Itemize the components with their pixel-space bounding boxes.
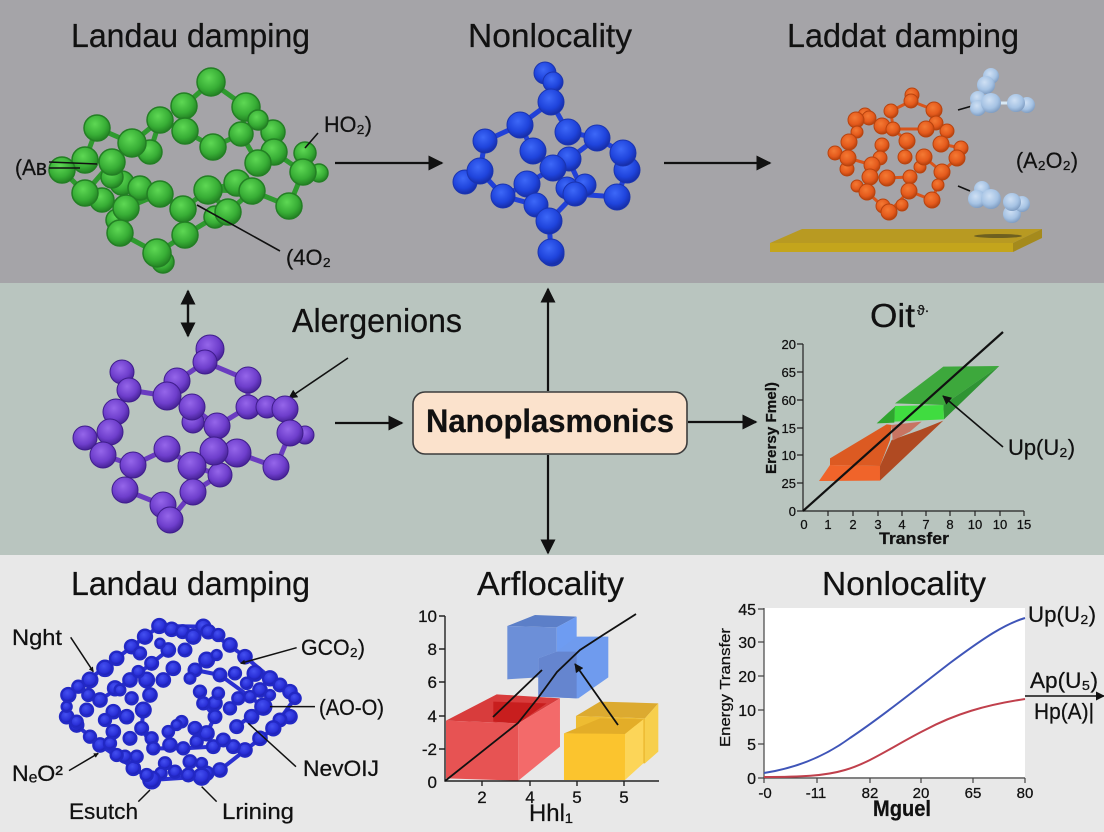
y tick labels: 10	[738, 703, 756, 720]
plot area	[764, 608, 1025, 777]
red block	[446, 694, 560, 781]
x tick labels: -11	[806, 785, 826, 802]
heading: Oit: Oit	[870, 297, 915, 334]
blue molecule	[453, 62, 640, 266]
y tick labels: 20	[782, 337, 796, 352]
x tick labels: 10	[993, 517, 1007, 532]
axes	[439, 616, 659, 786]
title: Nonlocality: Nonlocality	[468, 17, 632, 54]
y tick labels: 0	[789, 504, 796, 519]
label: Lrining: Lrining	[222, 799, 294, 824]
label: NeO2: NₑO²	[12, 761, 63, 786]
label: Esutch: Esutch	[69, 799, 138, 824]
x tick labels: 1	[824, 517, 832, 532]
purple molecule	[73, 335, 314, 533]
label: (4O2: (4O₂	[286, 245, 331, 270]
label: Nght: Nght	[12, 625, 62, 650]
y axis title: Erersy Fmel)	[763, 382, 780, 474]
y tick labels: 65	[782, 365, 796, 380]
light blue cluster lower	[958, 181, 1030, 223]
blue curve	[764, 618, 1025, 773]
y tick labels	[782, 337, 796, 519]
short line	[493, 670, 542, 717]
x tick labels: 2	[477, 788, 487, 807]
arrow: box to chart	[688, 421, 756, 423]
blue blocks	[507, 615, 608, 698]
label: AO-O: (AO-O)	[319, 695, 384, 720]
arrow	[1025, 695, 1104, 697]
x tick labels	[758, 785, 1033, 802]
yellow blocks	[564, 702, 658, 780]
y tick labels: 20	[738, 669, 756, 686]
chart: energy transfer	[763, 332, 1075, 548]
title: Nonlocality: Nonlocality	[822, 565, 986, 602]
panel: top band	[0, 0, 1104, 283]
x tick labels: 80	[1017, 785, 1033, 802]
callout arrow	[943, 396, 1003, 447]
leader lines: green molecule	[49, 133, 318, 251]
x axis title: Hhl₁	[529, 800, 573, 827]
arrow: purple to center box	[335, 422, 402, 424]
x tick labels: 65	[965, 785, 981, 802]
x tick labels: 4	[525, 788, 535, 807]
label: GCO2: GCO₂)	[301, 635, 365, 660]
label: Ag: (Aв	[15, 155, 47, 180]
x tick labels: 5	[572, 788, 582, 807]
title: Arflocality: Arflocality	[477, 565, 625, 602]
y tick labels: 4	[428, 707, 437, 726]
gold slab	[770, 229, 1042, 252]
arrow: blue to orange	[664, 162, 770, 164]
light blue cluster upper	[958, 68, 1035, 116]
label: NevOIJ: NevOIJ	[303, 756, 379, 781]
x tick labels: 10	[968, 517, 982, 532]
arrow: up to Nonlocality	[547, 289, 549, 391]
red curve	[764, 699, 1025, 777]
x tick labels: 8	[946, 517, 954, 532]
heading: Alergenions: Alergenions	[292, 302, 462, 339]
y axis title: Energy Transfer	[717, 628, 734, 747]
y tick labels: 6	[428, 673, 437, 692]
y tick labels: 0	[428, 773, 437, 792]
double arrow	[187, 291, 189, 336]
title: Landau damping: Landau damping	[71, 565, 310, 602]
label: HO2: HO₂)	[324, 112, 372, 137]
title: Landau damping: Landau damping	[71, 17, 310, 54]
x tick labels: 2	[849, 517, 857, 532]
y tick labels: 5	[747, 737, 756, 754]
axes	[758, 608, 1025, 783]
chart: line chart	[717, 602, 1104, 821]
orange prism	[819, 421, 943, 481]
x tick labels: 15	[1017, 517, 1031, 532]
panel: bottom band	[0, 555, 1104, 832]
trend line	[803, 332, 1003, 511]
green prism	[877, 366, 999, 423]
x tick labels	[477, 788, 629, 807]
axes	[797, 344, 1024, 516]
y tick labels: 45	[738, 602, 756, 619]
green molecule	[49, 68, 328, 273]
y tick labels: 8	[428, 640, 437, 659]
x tick labels: 7	[922, 517, 930, 532]
y tick labels: 15	[782, 421, 796, 436]
panel: middle band	[0, 283, 1104, 555]
chart: 3D blocks	[418, 607, 659, 827]
x tick labels	[800, 517, 1031, 532]
y tick labels: 10	[418, 607, 437, 626]
blue ring molecule	[60, 619, 301, 788]
y tick labels: 25	[782, 476, 796, 491]
x tick labels: 5	[619, 788, 629, 807]
leader arrow: Alergenions	[289, 358, 348, 398]
y tick labels	[418, 607, 437, 792]
x tick labels: 3	[874, 517, 882, 532]
series label: Ap(U5): Ap(U₅)	[1030, 668, 1098, 693]
y tick labels	[738, 602, 756, 788]
title: Laddat damping: Laddat damping	[787, 17, 1019, 54]
x axis title: Mguel	[873, 796, 931, 821]
x tick labels: 4	[898, 517, 906, 532]
leader lines	[69, 637, 315, 802]
label: A2O2: (A₂O₂)	[1016, 148, 1078, 173]
series label: Up(U2): Up(U₂)	[1028, 602, 1096, 627]
arrow: green to blue	[335, 162, 442, 164]
y tick labels: 30	[738, 635, 756, 652]
orange molecule	[828, 88, 968, 220]
center box: Nanoplasmonics	[413, 392, 687, 454]
y tick labels: -2	[422, 740, 437, 759]
arrow	[575, 664, 618, 725]
trend line	[445, 614, 636, 781]
y tick labels: 0	[747, 771, 756, 788]
x tick labels: 0	[800, 517, 808, 532]
heading: Oit: ϑ·	[917, 302, 929, 318]
series label: Hp(A): Hp(A)|	[1034, 699, 1094, 724]
x tick labels: 82	[862, 785, 878, 802]
x axis title: Transfer	[879, 529, 949, 548]
center box: Nanoplasmonics: Nanoplasmonics	[426, 403, 674, 439]
x tick labels: 20	[913, 785, 929, 802]
arrow: down to Arflocality	[547, 455, 549, 553]
callout label: Up(U₂)	[1008, 435, 1075, 460]
x tick labels: -0	[758, 785, 772, 802]
y tick labels: 60	[782, 393, 796, 408]
y tick labels: 10	[782, 448, 796, 463]
